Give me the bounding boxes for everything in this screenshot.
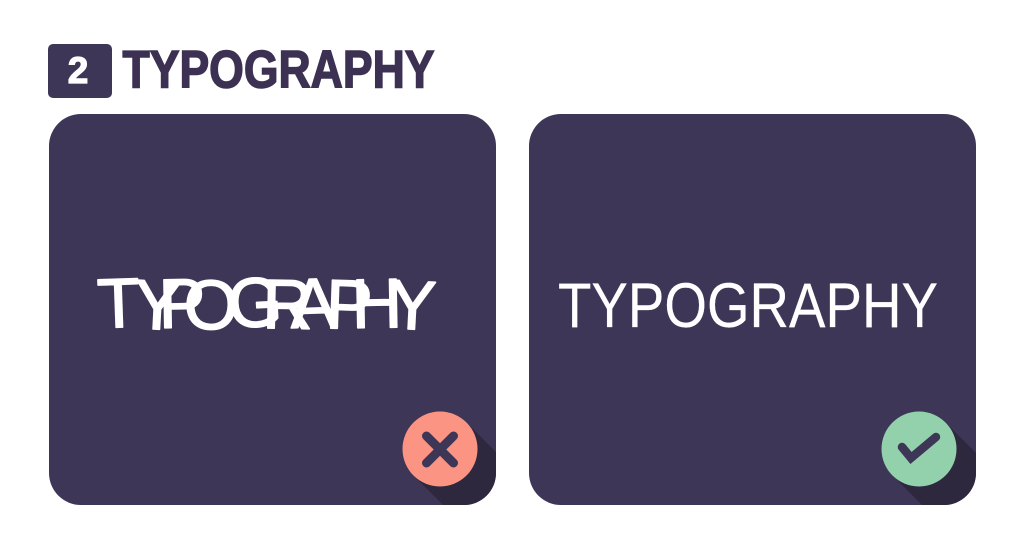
messy typography sample: TYPOGRAPHY <box>96 262 438 345</box>
infographic <box>48 44 976 505</box>
icon shadow <box>414 422 496 505</box>
icon: check mark <box>882 412 956 486</box>
icon: cross <box>402 412 478 486</box>
number badge <box>48 44 112 98</box>
panel: good typography <box>529 114 976 505</box>
panel: bad typography <box>49 114 496 505</box>
number badge: 2 <box>68 50 88 91</box>
icon shadow <box>892 422 976 505</box>
clean typography sample: TYPOGRAPHY <box>558 271 938 341</box>
heading: TYPOGRAPHY <box>122 40 434 100</box>
